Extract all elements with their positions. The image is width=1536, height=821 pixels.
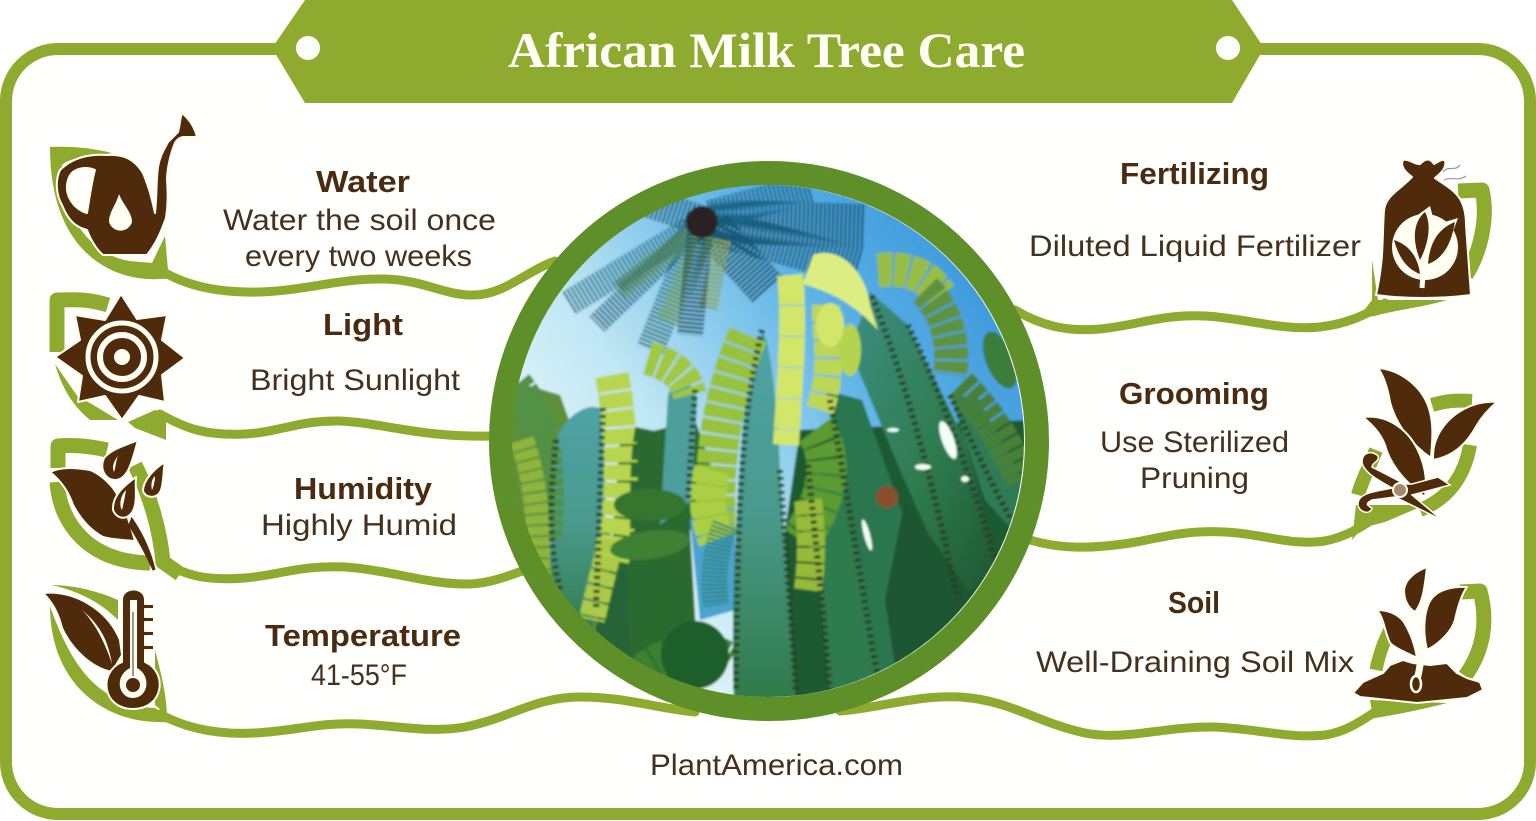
block: light [55,294,461,440]
heading: water: Water [316,164,410,199]
photo ring [501,173,1037,709]
icon: thermometer and leaf [43,585,180,723]
connector: temperature [160,697,695,733]
text: water: Water the soil once [223,204,496,237]
title: African Milk Tree Care [508,22,1025,78]
text: water: every two weeks [245,240,472,273]
icon: leaves and shears [1352,368,1497,540]
central photo [501,173,1037,709]
heading: grooming: Grooming [1119,376,1269,411]
icon: sun flower [55,294,185,440]
text: grooming: Use Sterilized [1100,426,1289,459]
text: fertilizing: Diluted Liquid Fertilizer [1029,230,1361,263]
cactus columns [548,407,606,640]
block: soil [1036,567,1484,722]
connector: light [160,414,495,436]
icon: seedling in soil [1353,567,1484,722]
connector: humidity [165,563,525,584]
palm [569,188,865,350]
spines [551,296,1022,695]
text: soil: Well-Draining Soil Mix [1036,646,1354,679]
connector: soil [840,697,1378,736]
photo: african milk tree [510,180,1030,700]
block: humidity [50,440,457,574]
text: water [223,204,496,273]
block: grooming [1100,368,1497,540]
text: light: Bright Sunlight [250,364,461,397]
text: grooming [1100,426,1289,495]
heading: fertilizing: Fertilizing [1120,156,1269,191]
connector: grooming [1030,518,1375,547]
text: grooming: Pruning [1140,462,1249,495]
icon: leaf and drops [50,440,180,574]
text: humidity: Highly Humid [261,509,457,542]
connector: fertilizing [1015,303,1385,330]
connector: water [160,261,555,295]
heading: soil: Soil [1168,585,1220,620]
heading: light: Light [323,307,403,342]
site credit: PlantAmerica.com [650,749,903,782]
icon: watering can [50,113,197,279]
icon: fertilizer bag [1358,160,1484,318]
sun glints [860,419,969,551]
block: fertilizing [1029,156,1484,318]
lime leaf rows [516,270,1022,690]
rear foliage masses [512,382,612,631]
heading: temperature: Temperature [265,618,461,653]
block: water [50,113,496,279]
heading: humidity: Humidity [294,471,433,506]
text: temperature: 41-55°F [311,659,407,692]
block: temperature [43,585,461,723]
title banner [272,0,1264,103]
